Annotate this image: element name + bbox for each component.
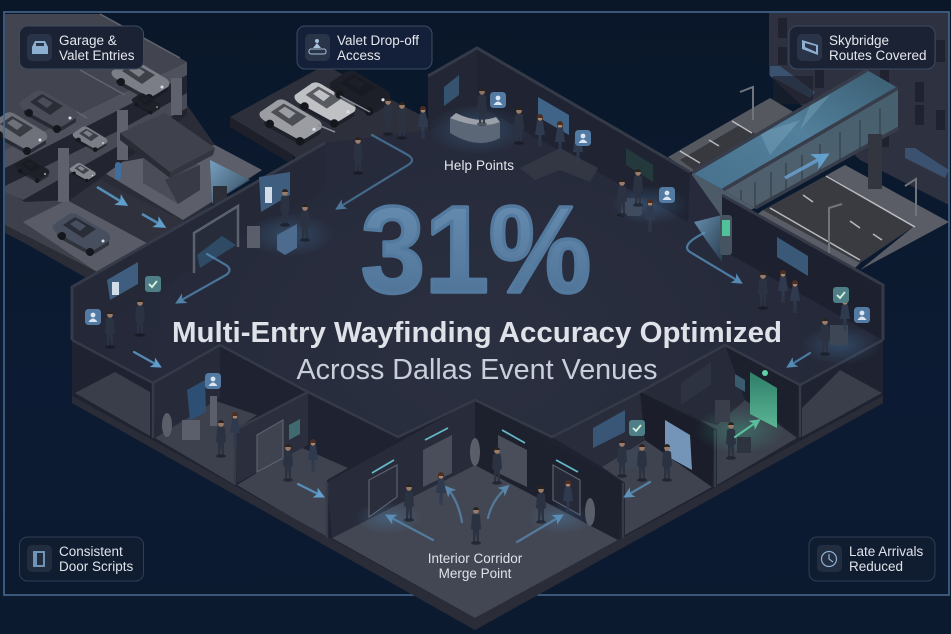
valet drop-off lot xyxy=(230,65,430,190)
wall top rims xyxy=(72,48,883,340)
people xyxy=(105,88,850,545)
venue perimeter back walls xyxy=(72,48,883,340)
central floor glows xyxy=(245,105,880,534)
label: help points: Help Points xyxy=(444,158,514,173)
building windows xyxy=(778,18,945,147)
upper deck interior xyxy=(5,62,187,202)
callout: valet xyxy=(297,26,432,69)
board help wide xyxy=(538,97,569,135)
garage building xyxy=(0,14,262,280)
callout: garage xyxy=(20,26,144,69)
callout: valet: Valet Drop-off xyxy=(337,33,419,48)
wayfinding arrows xyxy=(134,135,810,542)
callout: late arrivals: Reduced xyxy=(849,559,903,574)
icon: clock xyxy=(817,545,842,572)
gatehouse xyxy=(115,113,215,204)
board room green xyxy=(681,362,711,405)
street lamps xyxy=(740,87,916,253)
callout: skybridge: Skybridge xyxy=(829,33,889,48)
venue main floor xyxy=(72,48,883,630)
status badges xyxy=(85,92,870,436)
lit garage doorway xyxy=(210,160,250,204)
callout: door scripts: Door Scripts xyxy=(59,559,134,574)
room walls xyxy=(153,345,800,540)
middle deck band xyxy=(5,93,187,200)
icon: door xyxy=(27,545,52,572)
deck columns xyxy=(58,78,182,202)
callout: door scripts: Consistent xyxy=(59,544,123,559)
ground parking slab xyxy=(5,178,147,280)
cars in garage xyxy=(0,59,169,256)
label: interior corridor: Interior Corridor xyxy=(428,551,523,566)
doorway portal xyxy=(193,206,239,273)
board left upper xyxy=(259,172,290,212)
room floors xyxy=(75,370,882,618)
board help tall xyxy=(444,75,459,106)
valet cars xyxy=(259,70,391,146)
subheading: Across Dallas Event Venues xyxy=(296,354,658,386)
callout: valet: Access xyxy=(337,48,381,63)
streets under skybridge xyxy=(668,87,949,270)
front slab edge xyxy=(72,396,883,630)
wall rims xyxy=(72,340,883,538)
headline: Multi-Entry Wayfinding Accuracy Optimized xyxy=(172,317,782,349)
upper deck surface xyxy=(5,14,187,150)
callout: door scripts xyxy=(20,537,144,581)
board room 3 xyxy=(289,419,300,440)
board green right xyxy=(626,148,653,182)
road arrows xyxy=(97,187,163,226)
gatehouse sidewalk xyxy=(103,145,262,220)
signs and boards xyxy=(107,75,808,448)
icon: valet xyxy=(305,34,330,61)
callout: late arrivals: Late Arrivals xyxy=(849,544,924,559)
board left xyxy=(107,262,138,300)
board room 2 xyxy=(187,380,206,420)
callout: late arrivals xyxy=(809,537,935,581)
building behind skybridge xyxy=(769,13,949,205)
entry road xyxy=(67,180,185,243)
desks and furniture xyxy=(162,113,848,526)
doors xyxy=(257,370,777,517)
icon: car xyxy=(27,34,52,61)
big stat: 31% xyxy=(361,182,591,319)
skybridge xyxy=(692,70,899,222)
callout: garage: Valet Entries xyxy=(59,48,135,63)
callout: garage: Garage & xyxy=(59,33,117,48)
board right xyxy=(777,237,808,276)
lower rooms xyxy=(72,340,883,630)
board room right xyxy=(593,410,625,448)
callout: skybridge: Routes Covered xyxy=(829,48,927,63)
icon: skybridge xyxy=(797,34,822,61)
label: interior corridor: Merge Point xyxy=(439,566,512,581)
callout: skybridge xyxy=(789,26,935,69)
awnings xyxy=(770,66,815,98)
